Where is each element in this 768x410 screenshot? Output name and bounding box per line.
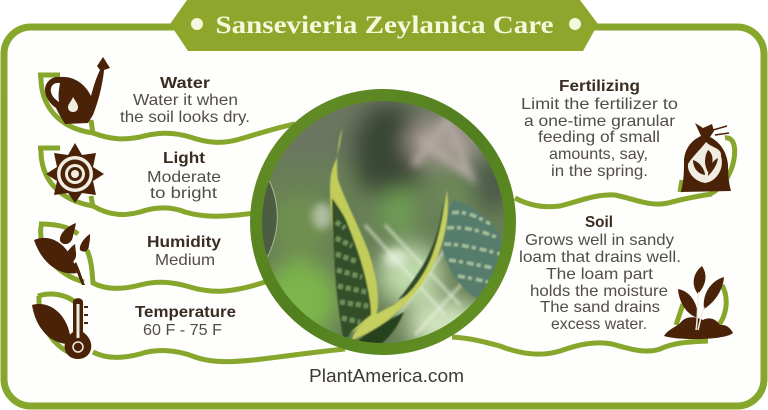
banner shape bbox=[170, 0, 598, 51]
care item: temperature bbox=[32, 298, 236, 359]
icon: thermometer bbox=[65, 298, 91, 359]
icon: sprout in soil bbox=[664, 266, 733, 339]
heading: light: Light bbox=[163, 150, 205, 167]
icon: water drop bbox=[68, 97, 78, 112]
icon: fertilizer bag bbox=[681, 123, 731, 192]
heading: temperature: Temperature bbox=[135, 304, 236, 321]
text: water line 2: the soil looks dry. bbox=[120, 109, 250, 126]
text: light line 2: to bright bbox=[150, 185, 218, 202]
blue-green leaf bbox=[442, 200, 503, 299]
text: fertilizing body: a one-time granular bbox=[524, 113, 676, 130]
icon: watering can bbox=[45, 57, 110, 124]
photo blurred background bbox=[262, 101, 504, 343]
left snake plant leaf bbox=[330, 128, 378, 338]
text: fertilizing body: Limit the fertilizer to bbox=[521, 96, 678, 113]
plant photo bbox=[250, 90, 516, 351]
text: soil body: loam that drains well. bbox=[519, 249, 681, 266]
icon: sun bbox=[46, 143, 104, 203]
heading: humidity: Humidity bbox=[147, 234, 221, 251]
photo ring bbox=[256, 95, 510, 349]
heading: fertilizing: Fertilizing bbox=[559, 78, 640, 95]
website credit: PlantAmerica.com bbox=[309, 366, 464, 386]
text: water line 1: Water it when bbox=[133, 92, 238, 109]
right snake plant leaf bbox=[352, 190, 448, 345]
text: light line 1: Moderate bbox=[147, 169, 221, 186]
text: soil body bbox=[519, 232, 681, 333]
text: soil body: Grows well in sandy bbox=[525, 232, 674, 249]
connector: soil bbox=[452, 285, 726, 354]
text: fertilizing body: in the spring. bbox=[551, 163, 648, 180]
icon: leaves with drops bbox=[34, 223, 90, 285]
connector: temperature bbox=[38, 294, 345, 362]
text: soil body: The sand drains bbox=[540, 299, 660, 316]
care item: light bbox=[46, 143, 221, 203]
text: fertilizing body: amounts, say, bbox=[549, 146, 648, 163]
connector: humidity bbox=[39, 224, 268, 291]
chain-link fence bbox=[363, 223, 463, 336]
text: temperature value: 60 F - 75 F bbox=[143, 322, 222, 339]
text: soil body: holds the moisture bbox=[530, 283, 668, 300]
text: soil body: excess water. bbox=[551, 316, 647, 333]
text: soil body: The loam part bbox=[546, 266, 654, 283]
connector: light bbox=[38, 148, 255, 216]
heading: soil: Soil bbox=[585, 214, 613, 231]
care item: fertilizing bbox=[521, 78, 731, 192]
icon: leaf bbox=[32, 304, 71, 344]
text: fertilizing body bbox=[521, 96, 678, 180]
title banner bbox=[170, 0, 598, 51]
left banner dot bbox=[191, 18, 203, 30]
heading: water: Water bbox=[160, 75, 210, 92]
care item: humidity bbox=[34, 223, 221, 285]
connector: fertilizing bbox=[515, 138, 735, 207]
care item: soil bbox=[519, 214, 733, 339]
care item: water bbox=[45, 57, 250, 126]
title text: Sansevieria Zeylanica Care bbox=[216, 12, 554, 39]
text: fertilizing body: feeding of small bbox=[538, 129, 660, 146]
right banner dot bbox=[569, 18, 581, 30]
connector: water bbox=[38, 75, 295, 142]
left background leaf bbox=[262, 182, 278, 256]
text: humidity value: Medium bbox=[155, 252, 215, 269]
